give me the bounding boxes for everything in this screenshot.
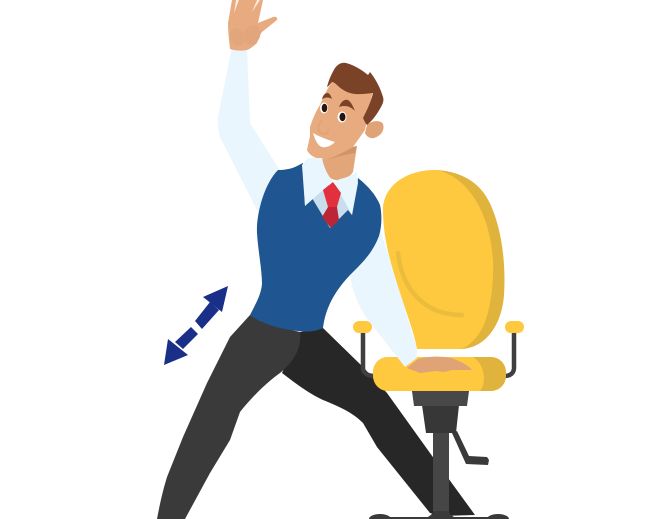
backrest seam: [398, 253, 462, 315]
nose: [318, 120, 328, 134]
left eye: [320, 102, 328, 114]
man: [157, 0, 472, 519]
neck: [318, 146, 357, 180]
jaw shadow: [322, 146, 357, 160]
shirt collar: [302, 158, 358, 215]
right armrest: [505, 321, 524, 376]
necktie: [322, 182, 341, 228]
chair backrest shell: [430, 170, 504, 349]
vest: [250, 163, 381, 332]
far leg: [282, 328, 475, 516]
raised hand: [227, 0, 277, 51]
smile: [313, 133, 335, 147]
hair: [327, 63, 383, 125]
left armrest: [353, 321, 374, 376]
right eyebrow: [339, 100, 355, 111]
resting hand: [407, 357, 472, 373]
chair seat: [373, 357, 506, 391]
chair base and wheels: [369, 508, 509, 519]
chair backrest front: [383, 170, 493, 349]
near leg: [157, 315, 300, 519]
chair gas lift and lever: [412, 391, 489, 511]
office chair: [353, 170, 524, 519]
right eye: [338, 112, 346, 122]
shirt front: [303, 185, 358, 232]
raised arm sleeve: [218, 47, 281, 212]
face: [307, 72, 373, 160]
ear: [365, 121, 384, 138]
icon: double-headed stretch arrow: [164, 286, 228, 365]
lowered arm sleeve: [350, 228, 417, 367]
left eyebrow: [322, 93, 332, 99]
